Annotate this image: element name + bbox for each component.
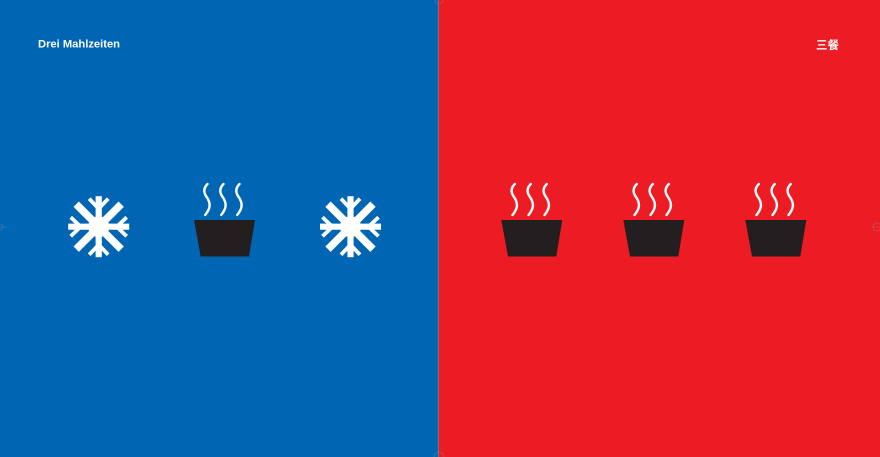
icon: steaming bowl, hot dinner: [745, 184, 806, 256]
panel: blue, German three meals: [0, 0, 438, 457]
icon: steaming bowl, hot breakfast: [501, 184, 562, 256]
heading: 三餐: 三餐: [816, 38, 839, 52]
icon: snowflake, cold breakfast: [68, 196, 129, 257]
heading: Drei Mahlzeiten: Drei Mahlzeiten: [38, 38, 120, 50]
icon: steaming bowl, hot lunch: [623, 184, 684, 256]
icon: steaming bowl, hot lunch: [194, 184, 255, 256]
icon: snowflake, cold dinner: [320, 196, 381, 257]
panel: red, Chinese three meals: [438, 0, 880, 457]
